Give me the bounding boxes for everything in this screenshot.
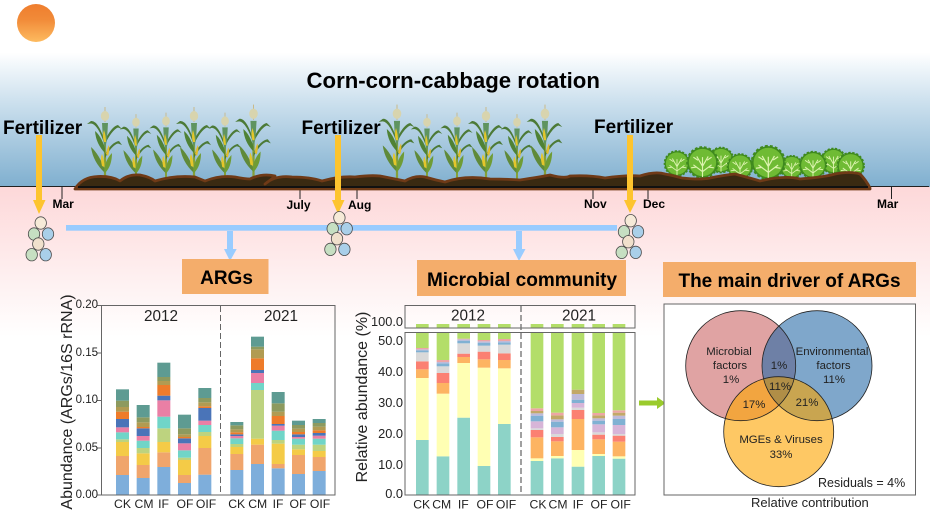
arrow: green to driver panel	[639, 397, 666, 409]
venn labels: factors	[816, 360, 851, 372]
fertilizer 1	[3, 118, 83, 214]
venn labels: 11%	[769, 381, 791, 393]
x labels: OIF	[310, 497, 330, 511]
x labels: CK	[228, 497, 245, 511]
venn labels: 21%	[796, 397, 818, 409]
title: Corn-corn-cabbage rotation	[306, 68, 600, 93]
venn labels: 1%	[723, 374, 739, 386]
x labels: CM	[432, 498, 451, 512]
year labels: 2012	[144, 308, 178, 325]
year divider	[220, 306, 222, 495]
y tick labels: 20.0	[378, 426, 403, 441]
y axis title: Relative abundance (%)	[354, 312, 371, 482]
stacked bars	[116, 337, 326, 495]
stacked bars	[416, 324, 625, 495]
venn labels: Environmental	[796, 346, 868, 358]
y tick labels: 30.0	[378, 395, 403, 410]
sun	[17, 4, 55, 42]
x labels: IF	[273, 497, 283, 511]
y tick labels	[371, 314, 403, 501]
x labels: OIF	[496, 498, 516, 512]
corn plants, first season	[87, 105, 271, 180]
x labels: OF	[177, 497, 193, 511]
venn labels: Microbial	[706, 346, 752, 358]
y tick labels: 0.10	[76, 394, 98, 406]
venn labels: factors	[713, 360, 747, 372]
year labels	[451, 308, 596, 324]
timeline with month labels: Mar	[52, 197, 74, 211]
x labels: IF	[573, 498, 583, 512]
y tick labels: 0.00	[76, 489, 98, 501]
heading: ARGs	[182, 259, 268, 294]
year labels: 2012	[451, 308, 485, 324]
timeline with month labels: Nov	[584, 197, 607, 211]
panel: microbial community bar chart	[354, 306, 635, 512]
y tick labels: 0.20	[76, 299, 98, 311]
y tick labels: 50.0	[378, 333, 403, 348]
venn labels: 11%	[823, 374, 845, 386]
timeline with month labels: Mar	[877, 197, 899, 211]
y tick labels: 10.0	[378, 457, 403, 472]
cabbage plants	[665, 146, 864, 179]
fertilizer 1: Fertilizer	[3, 118, 83, 139]
microbes 1	[26, 217, 54, 261]
x labels: CM	[549, 498, 567, 512]
venn labels	[706, 346, 868, 461]
x labels	[413, 498, 631, 512]
year labels: 2021	[264, 308, 298, 325]
ground line under soil	[78, 186, 868, 188]
timeline with month labels: Dec	[643, 197, 665, 211]
y tick labels	[76, 299, 98, 501]
x labels: OF	[290, 497, 306, 511]
x labels: OF	[591, 498, 607, 512]
fertilizer 3	[594, 117, 674, 213]
y tick labels: 100.0	[371, 314, 403, 329]
heading: Microbial community: Microbial community	[427, 270, 617, 291]
x labels: CK	[530, 498, 546, 512]
x labels: CK	[114, 497, 131, 511]
year labels: 2021	[562, 308, 596, 324]
x label: Relative contribution	[751, 495, 869, 510]
microbes 3	[616, 214, 644, 259]
panel: ARGs abundance bar chart	[59, 294, 335, 511]
timeline with month labels: Aug	[348, 198, 371, 212]
fertilizer 3: Fertilizer	[594, 117, 674, 138]
y axis title: Abundance (ARGs/16S rRNA)	[59, 294, 76, 510]
frame	[664, 304, 916, 495]
x labels: OIF	[196, 497, 216, 511]
fertilizer 2: Fertilizer	[302, 118, 381, 139]
x labels: CM	[135, 497, 153, 511]
heading: Microbial community	[417, 260, 626, 296]
x labels: OIF	[611, 498, 631, 512]
blue distribution line	[66, 225, 617, 261]
x labels: IF	[458, 498, 469, 512]
venn labels: 33%	[770, 449, 792, 461]
venn labels: 17%	[743, 399, 765, 411]
x labels: CM	[248, 497, 267, 511]
timeline with month labels	[0, 186, 929, 212]
corn plants, second season	[379, 105, 562, 180]
residuals: Residuals = 4%	[818, 476, 905, 490]
year labels	[144, 308, 298, 325]
heading: ARGs: ARGs	[200, 268, 253, 289]
y tick labels: 0.0	[385, 486, 403, 501]
soil background	[0, 187, 930, 337]
x labels: OF	[477, 498, 493, 512]
venn labels: MGEs & Viruses	[739, 434, 823, 446]
axes frame	[97, 306, 335, 495]
panel: Venn diagram	[664, 304, 916, 510]
y tick labels: 40.0	[378, 364, 403, 379]
year divider	[520, 306, 522, 495]
y tick labels: 0.05	[76, 442, 98, 454]
heading: main driver: The main driver of ARGs	[678, 271, 901, 292]
sky background	[0, 0, 930, 187]
microbes 2	[325, 212, 352, 256]
heading: main driver	[663, 262, 916, 297]
fertilizer 2	[302, 118, 381, 214]
x labels: IF	[158, 497, 169, 511]
x labels: CK	[413, 498, 430, 512]
soil mounds	[75, 172, 870, 189]
venn labels: 1%	[771, 360, 787, 372]
x labels	[114, 497, 330, 511]
y tick labels: 0.15	[76, 347, 98, 359]
timeline with month labels: July	[286, 198, 311, 212]
axes frames	[405, 306, 635, 495]
venn circles	[686, 311, 872, 487]
